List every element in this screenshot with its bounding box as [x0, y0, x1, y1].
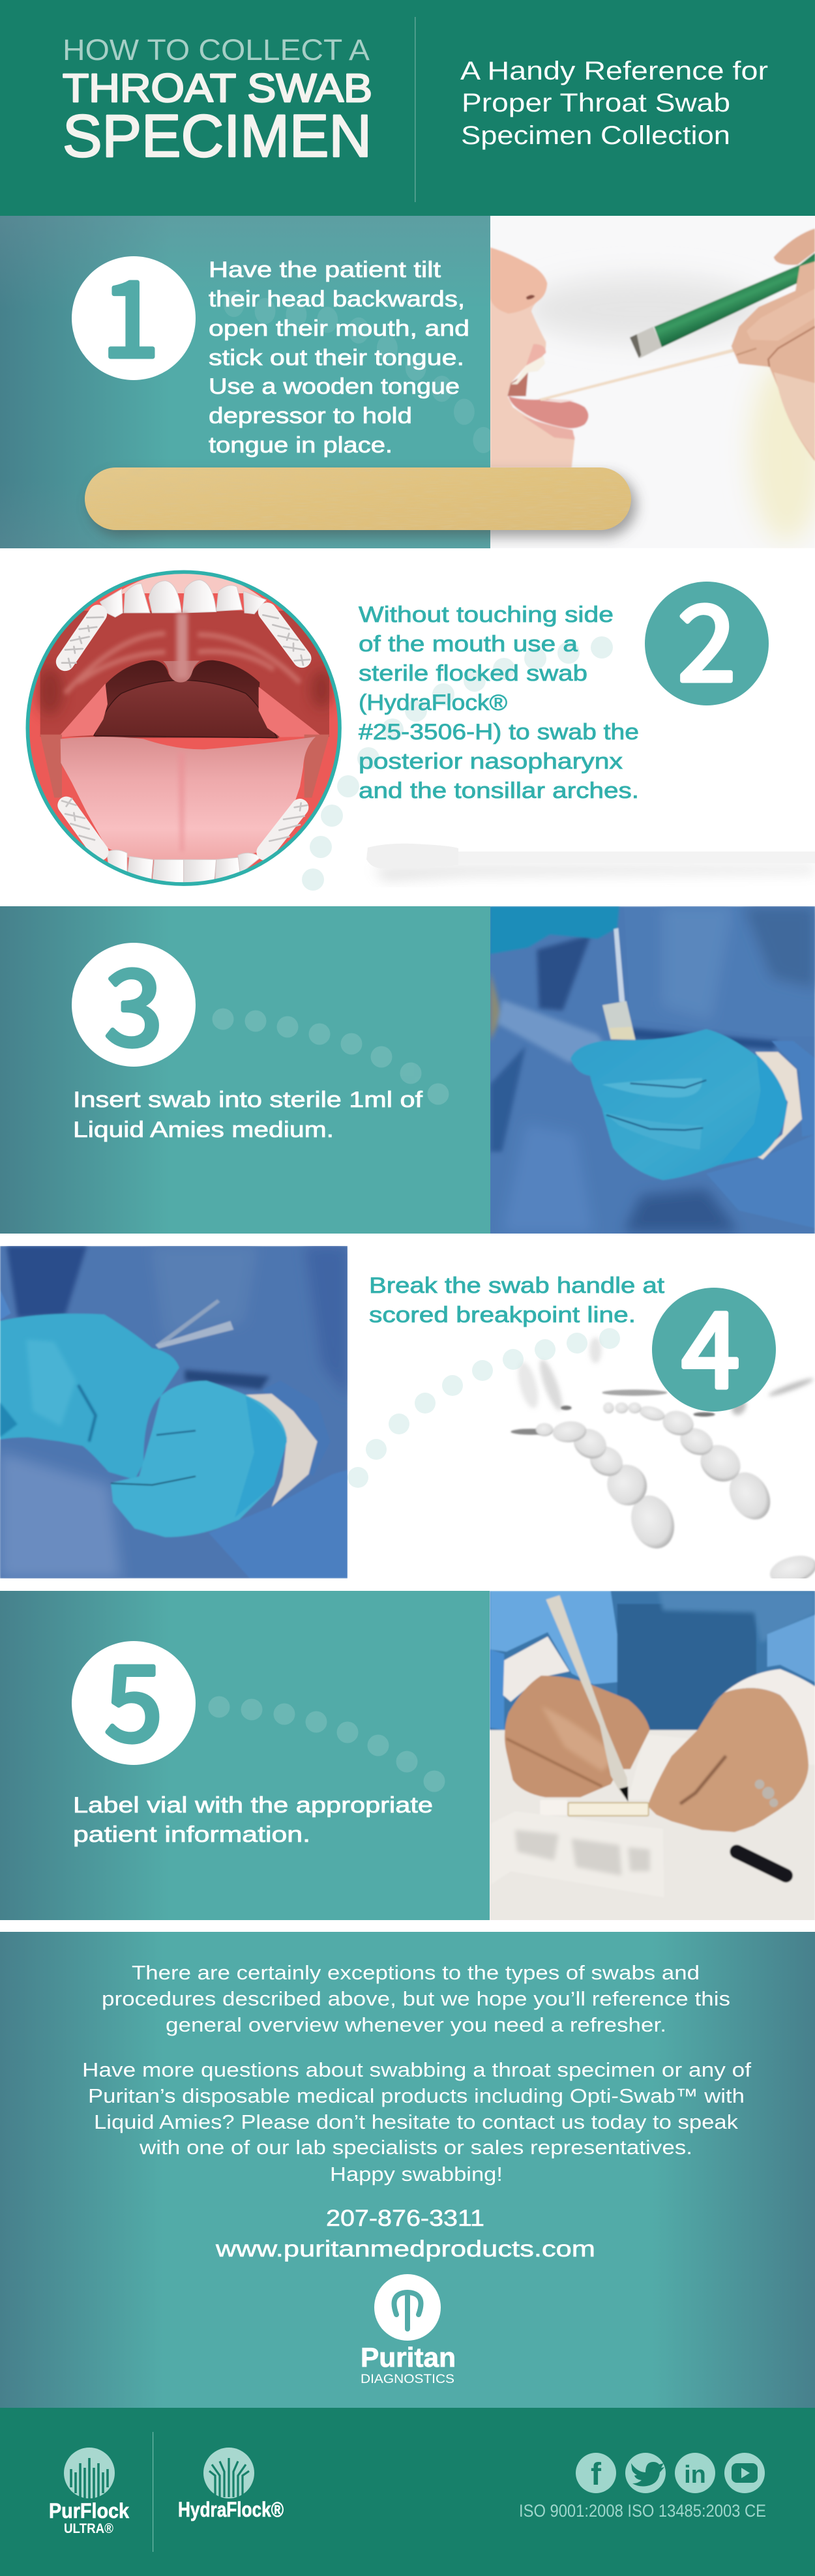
logo: HydraFlock: HydraFlock® — [178, 2498, 284, 2521]
right glove — [111, 1381, 287, 1537]
closing paragraph 2: with one of our lab specialists or sales representatives. — [139, 2136, 692, 2159]
panel: closing message — [0, 1932, 815, 2408]
logo: PurFlock Ultra — [49, 2448, 129, 2536]
certifications: ISO 9001:2008 ISO 13485:2003 CE — [519, 2501, 766, 2521]
closing paragraph 2 — [82, 2058, 751, 2185]
illustration: open mouth — [26, 569, 341, 887]
step 3 text — [73, 1088, 423, 1142]
step 2 text: and the tonsillar arches. — [359, 778, 639, 803]
closing paragraph 2: Happy swabbing! — [330, 2163, 503, 2185]
icon: wooden tongue depressor — [85, 467, 636, 537]
step 1 text: Use a wooden tongue — [209, 374, 460, 399]
header band — [0, 0, 815, 216]
face profile — [490, 299, 575, 467]
closing paragraph 2: Have more questions about swabbing a throat specimen or any of — [82, 2058, 751, 2081]
connecting dots step 3 — [213, 1008, 449, 1104]
number badge 4: 4 — [682, 1267, 739, 1418]
connecting dots step 1 — [224, 291, 494, 453]
throat — [95, 660, 279, 738]
number badge 5 — [72, 1620, 196, 1771]
step 2 text — [359, 602, 639, 803]
open mouth — [507, 371, 528, 396]
number badge 2 — [645, 560, 769, 711]
left glove — [0, 1314, 179, 1479]
step 4 text — [369, 1273, 665, 1327]
wooden stick — [539, 348, 734, 402]
ring — [755, 1779, 778, 1807]
gum — [100, 572, 267, 604]
panel: step 4 — [348, 1267, 815, 1588]
icon: YouTube — [724, 2453, 765, 2493]
closing paragraph 1: There are certainly exceptions to the types of swabs and — [132, 1961, 700, 1984]
marker pen — [546, 1595, 628, 1801]
connecting dots step 2 — [302, 636, 613, 891]
panel: step 5 — [0, 1591, 490, 1920]
step 2 text: posterior nasopharynx — [359, 749, 623, 774]
logo: Puritan Diagnostics: Puritan — [361, 2342, 456, 2373]
mouth floor sides — [40, 735, 62, 797]
left cuff — [503, 1636, 569, 1702]
contact details — [215, 2206, 595, 2262]
lower molars — [67, 805, 300, 852]
number badge 4 — [652, 1267, 776, 1418]
step 2 text: sterile flocked swab — [359, 661, 587, 686]
step 5 text — [73, 1793, 433, 1847]
photo: gloved hand holding vial — [489, 906, 815, 1234]
photo: patient with tongue out — [489, 216, 815, 548]
closing paragraph 1: procedures described above, but we hope you’ll reference this — [102, 1987, 730, 2010]
panel: step 2 — [26, 570, 815, 891]
back of throat — [94, 680, 277, 738]
number badge 3: 3 — [105, 925, 162, 1076]
step 1 text: open their mouth, and — [209, 316, 469, 341]
hand top finger — [774, 228, 815, 265]
step 3 text: Insert swab into sterile 1ml of — [73, 1088, 423, 1112]
step 1 text — [209, 258, 469, 458]
right cuff — [711, 1669, 815, 1765]
step 2 text: Without touching side — [359, 602, 614, 627]
number badge 5: 5 — [105, 1620, 162, 1771]
closing paragraph 2: Puritan’s disposable medical products including Opti-Swab™ with — [88, 2084, 745, 2107]
title: SPECIMEN — [63, 103, 372, 170]
swab pieces — [155, 1299, 220, 1348]
step 1 text: Have the patient tilt — [209, 258, 441, 282]
swab shaft — [614, 928, 625, 1002]
contact details: www.puritanmedproducts.com — [215, 2236, 595, 2262]
number badge 2: 2 — [678, 560, 735, 711]
logo: PurFlock Ultra: PurFlock — [49, 2499, 129, 2523]
footer band — [0, 2408, 815, 2576]
palate — [40, 611, 329, 737]
closing paragraph 1 — [102, 1961, 730, 2036]
cuff — [755, 1052, 802, 1159]
photo: gloved hands breaking swab — [0, 1246, 348, 1578]
vial with label — [540, 1800, 567, 1815]
top glove — [490, 906, 619, 954]
title — [63, 33, 372, 170]
icon: LinkedIn — [675, 2453, 715, 2493]
instruction paper — [491, 1811, 664, 1897]
step 1 text: their head backwards, — [209, 287, 465, 312]
icon: flocked swab — [366, 844, 815, 880]
tonsils — [58, 683, 108, 737]
logo: Puritan Diagnostics: DIAGNOSTICS — [361, 2373, 454, 2386]
subtitle: Proper Throat Swab — [462, 89, 730, 117]
step 2 text: of the mouth use a — [359, 632, 578, 657]
photo: hands labelling vial — [489, 1591, 815, 1923]
logo: Puritan Diagnostics — [361, 2274, 456, 2386]
step 1 text: stick out their tongue. — [209, 346, 464, 370]
sleeve — [706, 1134, 815, 1228]
left sleeve — [490, 1591, 617, 1684]
vial — [602, 1001, 636, 1040]
number badge 1: 1 — [102, 236, 159, 387]
icon: LinkedIn: in — [684, 2461, 706, 2489]
subtitle — [460, 57, 768, 150]
step 4 text: scored breakpoint line. — [369, 1303, 636, 1327]
panel: step 1 — [0, 216, 494, 548]
subtitle: A Handy Reference for — [460, 57, 768, 85]
swab beads — [536, 1402, 815, 1588]
connecting dots step 4 — [348, 1328, 620, 1488]
subtitle: Specimen Collection — [461, 121, 730, 150]
closing paragraph 1: general overview whenever you need a refresher. — [166, 2013, 666, 2036]
step 3 text: Liquid Amies medium. — [73, 1118, 334, 1142]
glove — [570, 1029, 787, 1180]
icon: Facebook: f — [591, 2457, 602, 2492]
sleeve — [209, 1470, 348, 1578]
icon: Facebook — [576, 2453, 616, 2493]
panel: step 3 — [0, 906, 490, 1234]
upper teeth — [100, 580, 266, 617]
step 1 text: tongue in place. — [209, 433, 393, 458]
pen cap — [737, 1852, 786, 1876]
upper molars — [65, 612, 302, 662]
step 5 text: patient information. — [73, 1822, 310, 1847]
tongue — [61, 737, 316, 859]
icon: Twitter — [625, 2453, 666, 2493]
raphe — [177, 613, 188, 678]
photo: flocked swab fibres — [511, 1337, 815, 1588]
right sleeve — [767, 1615, 815, 1682]
step 4 text: Break the swab handle at — [369, 1273, 665, 1298]
logo: PurFlock Ultra: ULTRA® — [64, 2521, 113, 2536]
title: HOW TO COLLECT A — [63, 33, 370, 67]
lower teeth — [106, 850, 261, 885]
left hand — [505, 1676, 650, 1798]
hand — [732, 261, 815, 462]
number badge 3 — [72, 925, 196, 1076]
step 5 text: Label vial with the appropriate — [73, 1793, 433, 1818]
green instrument — [654, 253, 815, 348]
step 2 text: #25-3506-H) to swab the — [359, 720, 639, 745]
tongue — [509, 396, 588, 428]
logo: HydraFlock — [178, 2448, 284, 2521]
connecting dots step 5 — [209, 1696, 445, 1792]
step 2 text: (HydraFlock® — [359, 690, 507, 715]
title: THROAT SWAB — [63, 66, 372, 110]
cuff — [246, 1394, 318, 1507]
closing paragraph 2: Liquid Amies? Please don’t hesitate to contact us today to speak — [94, 2110, 739, 2133]
number badge 1 — [72, 236, 196, 387]
central tube — [628, 1734, 689, 1799]
step 1 text: depressor to hold — [209, 404, 412, 428]
uvula — [163, 660, 200, 683]
right hand — [647, 1688, 808, 1832]
contact details: 207-876-3311 — [326, 2206, 484, 2231]
header divider — [415, 17, 416, 202]
